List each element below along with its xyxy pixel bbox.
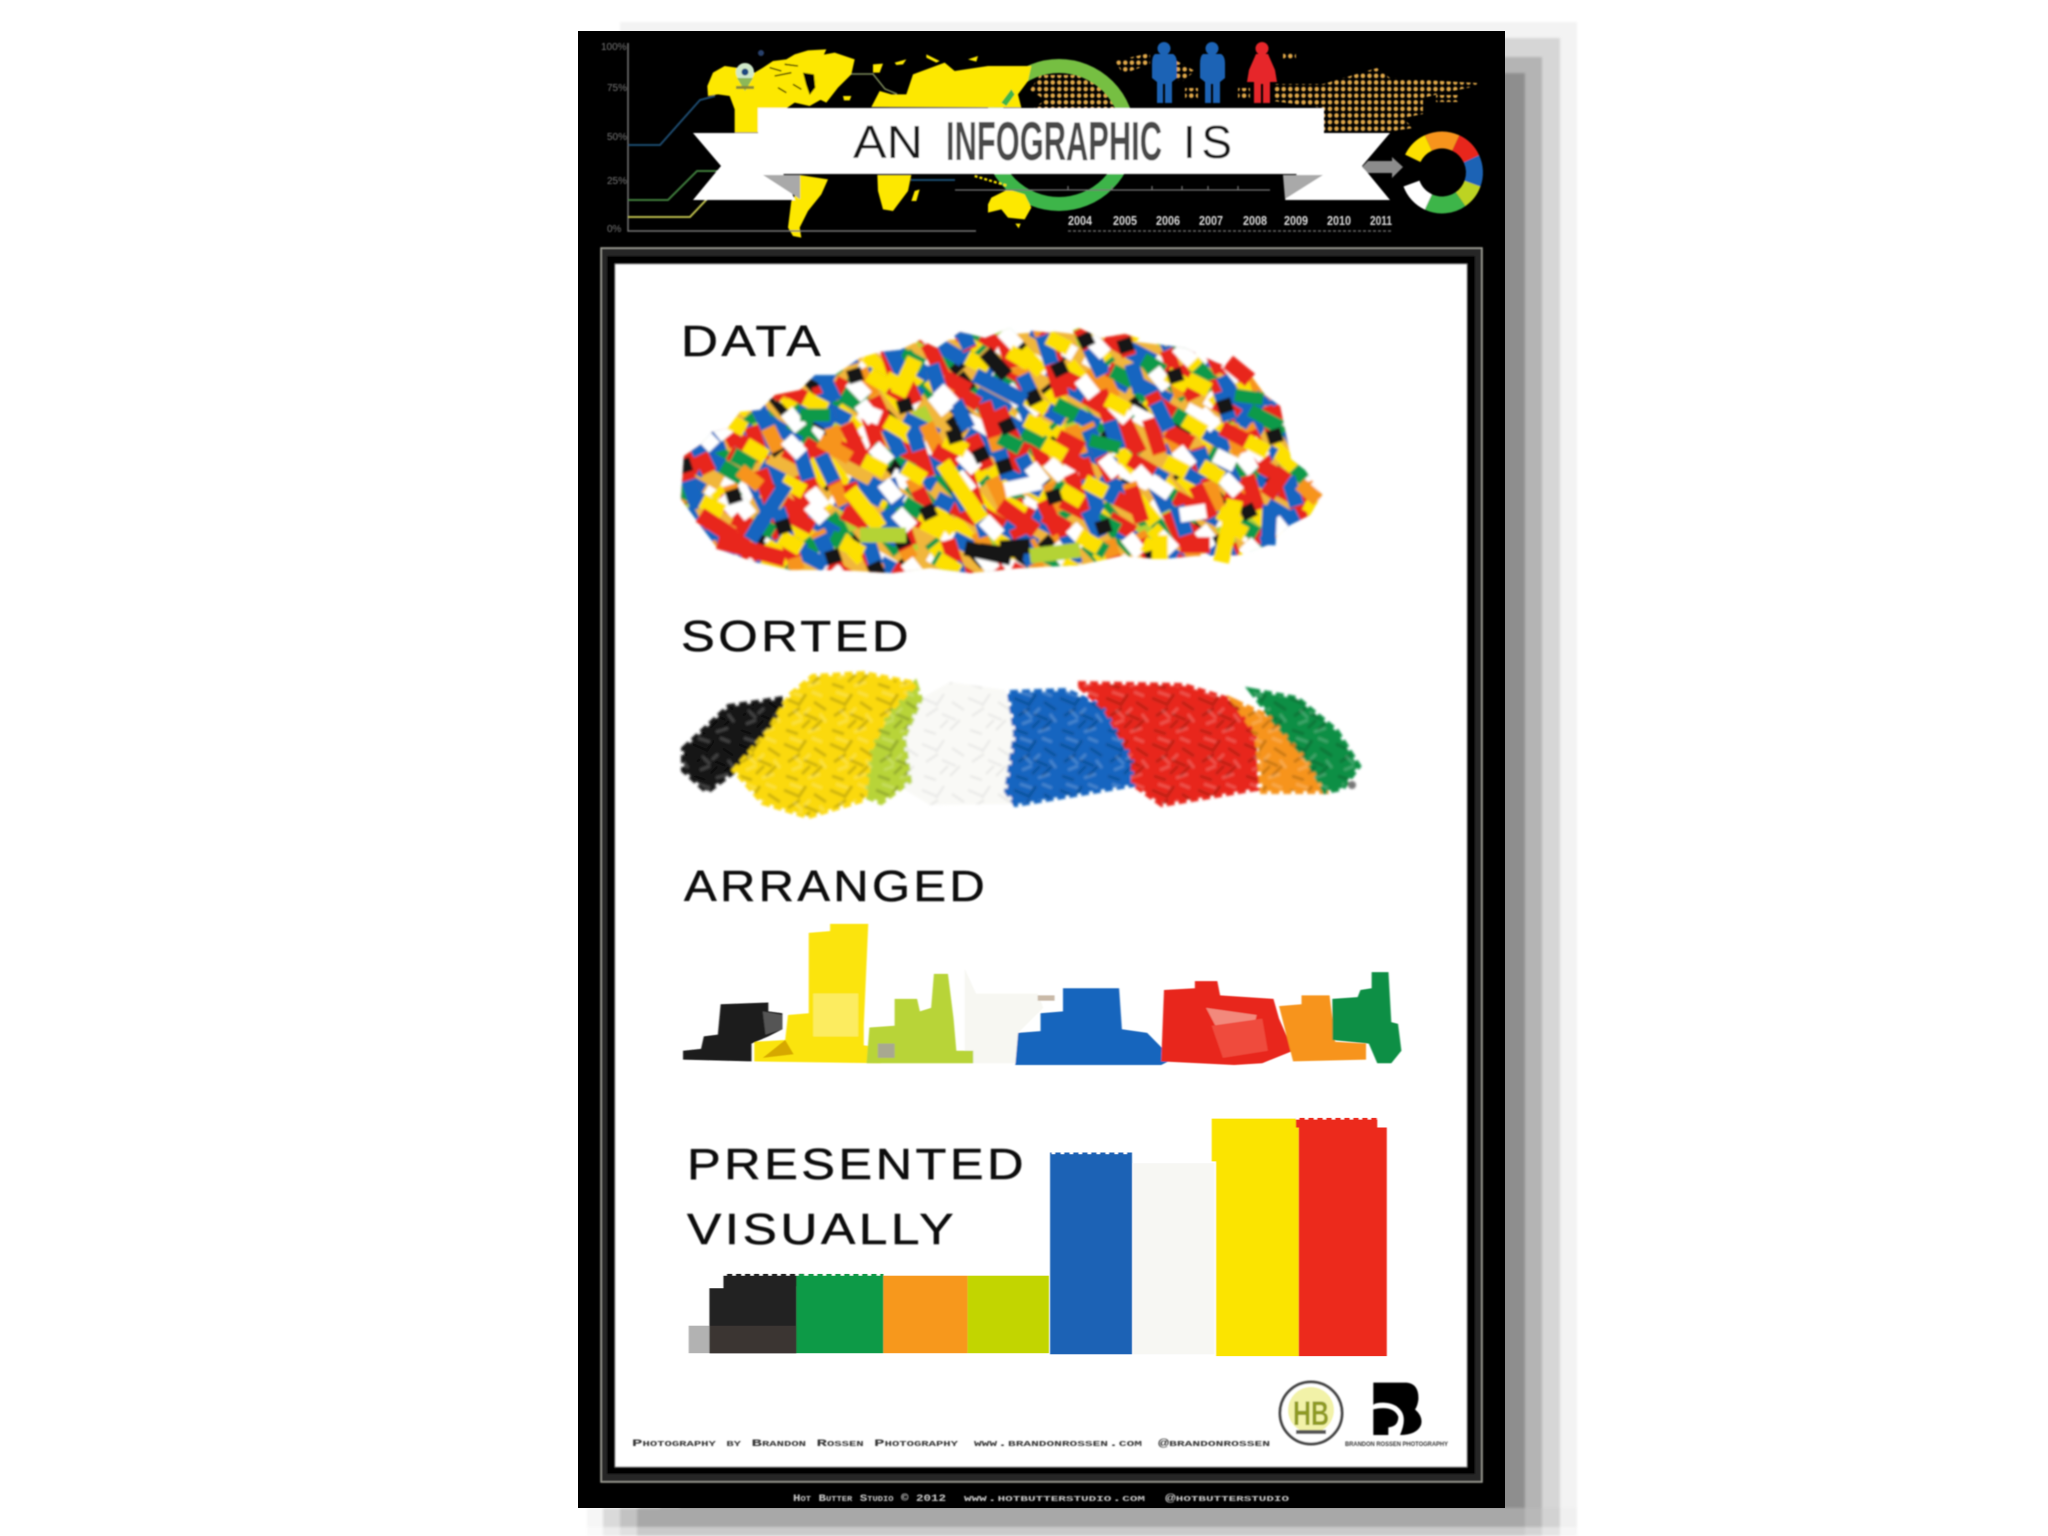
bar: yellow (1212, 1119, 1299, 1356)
timeline year labels: 2005 (1113, 213, 1137, 228)
stack: lime (867, 974, 973, 1063)
stack: black (683, 1002, 782, 1061)
timeline year labels: 2007 (1199, 213, 1223, 228)
heading: arranged: ARRANGED (684, 862, 988, 911)
stack: white (965, 969, 1043, 1063)
percent axis labels: 50% (607, 132, 627, 143)
logo: hot butter studio (1280, 1382, 1342, 1444)
sorted bricks: red (1078, 684, 1257, 804)
heading: data: DATA (681, 317, 824, 366)
people pictograms (1152, 42, 1277, 103)
studio credit: @hotbutterstudio (1165, 1493, 1289, 1505)
timeline year labels (1068, 213, 1392, 228)
bar: white (1133, 1163, 1215, 1354)
lego pile: bricks sorted by colour (684, 674, 1358, 816)
photography credit: www.brandonrossen.com (974, 1439, 1142, 1450)
sorted bricks: white (903, 682, 1016, 805)
timeline year labels: 2011 (1370, 213, 1392, 228)
brick texture overlay (684, 674, 1358, 816)
ribbon right fold (1283, 175, 1323, 199)
photography credit (632, 1438, 1270, 1450)
stack: blue (1015, 988, 1175, 1065)
bar: orange (883, 1276, 968, 1353)
title: AN (853, 116, 923, 168)
percent axis labels: 75% (607, 83, 627, 94)
yellow world map (707, 49, 1031, 238)
ribbon left fold (763, 175, 800, 199)
step 4: presented visually (687, 1118, 1387, 1356)
percent axis labels: 100% (601, 42, 627, 53)
bar: red (1296, 1118, 1387, 1356)
sorted bricks: lime (864, 684, 920, 802)
background drop shadow (587, 22, 1577, 1536)
studio credit: Hot Butter Studio © 2012 (793, 1493, 946, 1505)
bar: grey (689, 1326, 709, 1353)
ribbon main panel (758, 108, 1324, 174)
stack: orange (1279, 995, 1366, 1061)
timeline year labels: 2006 (1156, 213, 1180, 228)
sorted bricks: yellow (735, 674, 915, 816)
timeline year labels: 2009 (1284, 213, 1308, 228)
heading: presented visually (687, 1140, 1027, 1254)
stack: yellow (754, 924, 881, 1063)
location pin (736, 50, 764, 91)
bar chart: lego bars by colour (689, 1118, 1387, 1356)
lego stacks: bricks stacked by colour (683, 924, 1401, 1065)
heading: sorted: SORTED (681, 612, 912, 661)
bar: green (796, 1274, 883, 1353)
logo: hot butter studio: HB (1293, 1395, 1329, 1433)
timeline year labels: 2008 (1243, 213, 1267, 228)
sorted bricks: orange (1235, 702, 1325, 791)
white content panel with frame (601, 248, 1482, 1482)
logo: brandon rossen photography: BRANDON ROSSEN PHOTOGRAPHY (1345, 1442, 1448, 1448)
bar: black (709, 1274, 805, 1353)
bar: blue (1050, 1152, 1132, 1354)
colour donut chart (1412, 140, 1474, 205)
icon: red woman (1247, 42, 1277, 103)
studio credit: www.hotbutterstudio.com (964, 1494, 1145, 1505)
logo: brandon rossen photography (1345, 1383, 1448, 1448)
step 2: sorted (681, 612, 1358, 816)
poster black background (578, 31, 1505, 1508)
step 1: data (679, 324, 1324, 575)
sorted bricks: green (1252, 691, 1358, 791)
heading: presented visually: VISUALLY (687, 1205, 957, 1254)
grey arrow (1362, 157, 1403, 178)
timeline year labels: 2004 (1068, 213, 1093, 228)
ribbon right tail (1285, 133, 1390, 200)
sorted bricks: blue (1007, 691, 1134, 804)
title (853, 110, 1232, 172)
step 3: arranged (683, 862, 1401, 1065)
ribbon banner (693, 108, 1390, 200)
stack: green (1332, 972, 1401, 1063)
percent axis labels: 0% (607, 224, 622, 235)
heading: presented visually: PRESENTED (687, 1140, 1027, 1189)
stack: red (1161, 981, 1293, 1065)
percent axis labels: 25% (607, 176, 627, 187)
line chart axes (628, 43, 1392, 231)
icon: blue man (1200, 42, 1225, 103)
title: IS (1183, 116, 1232, 168)
footer credits and logos (632, 1382, 1448, 1505)
sorted bricks: black (684, 699, 783, 791)
studio credit (793, 1493, 1289, 1505)
lego pile: unsorted bricks (679, 326, 1324, 575)
bar: lime (968, 1276, 1049, 1353)
icon: blue man (1152, 42, 1177, 103)
percent axis labels (601, 42, 627, 235)
title: INFOGRAPHIC (946, 110, 1162, 172)
dot matrix world map (1030, 52, 1478, 132)
header graphic (601, 42, 1490, 238)
ribbon left tail (693, 133, 795, 200)
photography credit: Photography by Brandon Rossen Photography (632, 1439, 959, 1450)
green ring chart (990, 66, 1128, 204)
timeline year labels: 2010 (1327, 213, 1351, 228)
photography credit: @brandonrossen (1158, 1438, 1270, 1450)
